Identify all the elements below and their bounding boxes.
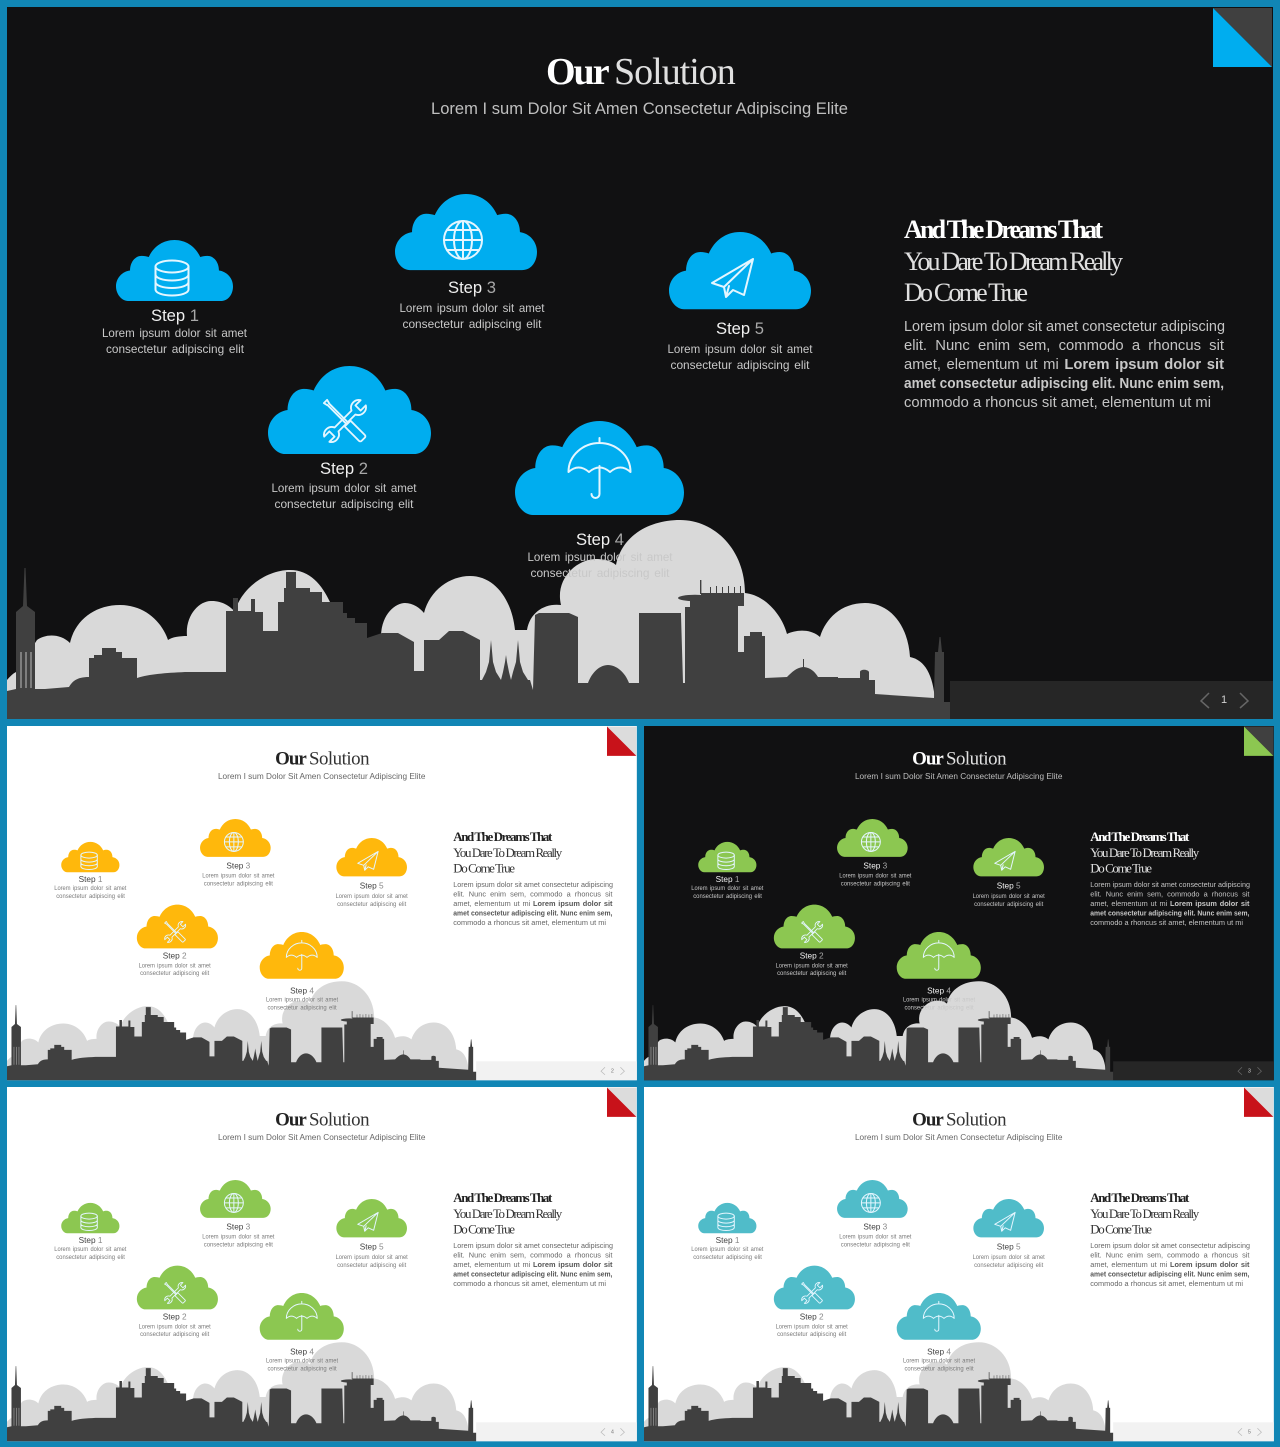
step 2 text: Step 2 (800, 950, 824, 960)
step 4 cloud (260, 1293, 344, 1340)
step 1 text: Lorem ipsum dolor sit amet (691, 886, 764, 892)
pagination (601, 1067, 624, 1075)
step 1 text (102, 306, 248, 356)
step 1 text (691, 1235, 764, 1261)
step 2 text: consectetur adipiscing elit (274, 497, 414, 511)
slide: light green version (7, 1087, 637, 1441)
step 2 text (272, 459, 417, 511)
subtitle: Lorem I sum Dolor Sit Amen Consectetur Adipiscing Elite (218, 1132, 426, 1142)
step 5 text: consectetur adipiscing elit (974, 902, 1044, 908)
side heading: Do Come True (453, 860, 515, 875)
step 4 text: Step 4 (927, 986, 951, 996)
slide background (644, 726, 1274, 1080)
step 4 text: consectetur adipiscing elit (267, 1367, 337, 1373)
step 4 text (528, 530, 673, 580)
step 2 cloud (137, 1266, 218, 1309)
pagination: 1 (1221, 694, 1227, 706)
footer band (476, 1422, 637, 1441)
step 3 text: Step 3 (863, 1221, 888, 1231)
step 5 cloud (973, 1199, 1044, 1237)
step 3 cloud (200, 1180, 271, 1218)
step 5 cloud (336, 838, 407, 876)
step 3 text (400, 278, 545, 331)
step 3 text: consectetur adipiscing elit (402, 317, 542, 331)
step 4 text: Step 4 (290, 986, 314, 996)
subtitle: Lorem I sum Dolor Sit Amen Consectetur Adipiscing Elite (218, 771, 426, 781)
pagination: 4 (611, 1429, 614, 1435)
step 2 cloud (268, 366, 431, 454)
step 4 text: consectetur adipiscing elit (530, 566, 670, 580)
step 5 text: Step 5 (716, 319, 764, 338)
step 3 text: Step 3 (448, 278, 496, 297)
step 2 text: consectetur adipiscing elit (777, 1332, 847, 1338)
step 2 text (776, 1311, 848, 1338)
step 1 cloud (61, 1203, 119, 1233)
title: Solution (309, 1109, 370, 1130)
step 4 text: Step 4 (576, 530, 624, 549)
step 4 cloud (897, 1293, 981, 1340)
step 4 text (903, 1347, 975, 1373)
side heading: And The Dreams That (453, 829, 553, 844)
step 2 text: Step 2 (320, 459, 368, 478)
step 4 cloud (260, 932, 344, 979)
side body text (904, 319, 1225, 411)
step 5 text (973, 881, 1045, 908)
pagination (1238, 1428, 1261, 1436)
corner fold (1244, 726, 1273, 756)
step 3 text: consectetur adipiscing elit (841, 882, 910, 888)
step 2 text: Lorem ipsum dolor sit amet (139, 963, 211, 969)
step 3 text (839, 1221, 912, 1249)
side heading (1090, 829, 1200, 875)
step 1 text: consectetur adipiscing elit (693, 1255, 762, 1261)
step 5 text: Lorem ipsum dolor sit amet (973, 1255, 1045, 1261)
side heading: You Dare To Dream Really (904, 247, 1123, 276)
step 1 text: Step 1 (716, 874, 740, 884)
side body text (1090, 880, 1250, 927)
step 2 text: Lorem ipsum dolor sit amet (139, 1324, 211, 1330)
step 3 cloud (395, 194, 537, 270)
side heading (453, 1190, 563, 1236)
step 5 text: consectetur adipiscing elit (670, 358, 810, 372)
side heading: Do Come True (1090, 1221, 1152, 1236)
step 4 text: Lorem ipsum dolor sit amet (266, 998, 338, 1004)
step 4 cloud (515, 421, 684, 515)
side body text: Lorem ipsum dolor sit amet consectetur adipiscing (1090, 1241, 1250, 1250)
step 5 text: Step 5 (997, 881, 1021, 891)
side body text: Lorem ipsum dolor sit amet consectetur adipiscing (453, 1241, 613, 1250)
step 3 text: Step 3 (226, 860, 251, 870)
title: Our (912, 1109, 943, 1130)
step 2 text: Lorem ipsum dolor sit amet (776, 963, 848, 969)
skyline buildings (644, 1005, 1113, 1080)
step 4 text (903, 986, 975, 1012)
skyline buildings (7, 568, 950, 719)
title: Our (275, 748, 306, 769)
title: Solution (946, 748, 1007, 769)
side body text: amet consectetur adipiscing elit. Nunc enim sem, (453, 1270, 612, 1279)
step 1 text (54, 874, 127, 900)
footer band (1113, 1422, 1274, 1441)
step 2 text (139, 1311, 211, 1338)
footer band (476, 1061, 637, 1080)
step 5 text: consectetur adipiscing elit (974, 1263, 1044, 1269)
step 4 text: consectetur adipiscing elit (267, 1006, 337, 1012)
step 1 cloud (116, 240, 233, 301)
step 4 cloud (897, 932, 981, 979)
step 4 text: Lorem ipsum dolor sit amet (266, 1359, 338, 1365)
step 4 text: consectetur adipiscing elit (904, 1367, 974, 1373)
title: Our (546, 51, 610, 93)
step 2 cloud (774, 905, 855, 948)
title: Solution (946, 1109, 1007, 1130)
step 1 text (54, 1235, 127, 1261)
step 5 text (336, 1242, 408, 1269)
side body text: amet consectetur adipiscing elit. Nunc enim sem, (453, 909, 612, 918)
skyline buildings (7, 1366, 476, 1441)
step 4 text: Lorem ipsum dolor sit amet (903, 1359, 975, 1365)
corner fold (1244, 1087, 1273, 1117)
side body text: elit. Nunc enim sem, commodo a rhoncus sit (904, 338, 1224, 354)
step 3 text: consectetur adipiscing elit (204, 882, 273, 888)
footer band (1113, 1061, 1274, 1080)
step 4 text: Lorem ipsum dolor sit amet (528, 550, 673, 564)
side heading: You Dare To Dream Really (1090, 1206, 1200, 1221)
slide: main dark blue version (7, 7, 1273, 719)
step 4 text (266, 986, 338, 1012)
step 5 cloud (336, 1199, 407, 1237)
side body text: amet consectetur adipiscing elit. Nunc enim sem, (1090, 909, 1249, 918)
side body text (1090, 1241, 1250, 1288)
side heading: Do Come True (904, 278, 1028, 307)
step 2 text: consectetur adipiscing elit (140, 1332, 210, 1338)
step 3 text: Step 3 (863, 860, 888, 870)
slide background (7, 726, 637, 1080)
step 2 text: Step 2 (163, 1311, 187, 1321)
corner fold (607, 1087, 636, 1117)
step 3 text: Lorem ipsum dolor sit amet (202, 1235, 275, 1241)
side body text: commodo a rhoncus sit amet, elementum ut mi (453, 918, 606, 927)
subtitle: Lorem I sum Dolor Sit Amen Consectetur Adipiscing Elite (431, 99, 848, 118)
side body text: amet, elementum ut mi Lorem ipsum dolor sit (1090, 899, 1250, 908)
side body text: elit. Nunc enim sem, commodo a rhoncus sit (1090, 890, 1249, 899)
step 1 text: consectetur adipiscing elit (106, 342, 245, 356)
step 2 cloud (137, 905, 218, 948)
side heading: You Dare To Dream Really (453, 1206, 563, 1221)
title: Solution (614, 51, 736, 93)
step 1 cloud (698, 842, 756, 872)
pagination: 2 (611, 1068, 614, 1074)
step 4 text: consectetur adipiscing elit (904, 1006, 974, 1012)
step 1 text: Step 1 (151, 306, 199, 325)
step 2 text: consectetur adipiscing elit (140, 971, 210, 977)
step 5 text: Step 5 (360, 1242, 384, 1252)
skyline backdrop clouds (7, 981, 469, 1077)
step 1 text: consectetur adipiscing elit (56, 1255, 125, 1261)
side heading: And The Dreams That (904, 215, 1103, 244)
step 2 text: Lorem ipsum dolor sit amet (272, 481, 417, 495)
slide: light teal version (644, 1087, 1274, 1441)
side body text (453, 1241, 613, 1288)
pagination: 5 (1248, 1429, 1251, 1435)
title: Our (912, 748, 943, 769)
side heading: And The Dreams That (1090, 829, 1190, 844)
step 3 text: Lorem ipsum dolor sit amet (400, 301, 545, 315)
step 3 cloud (837, 819, 908, 857)
step 3 text: Lorem ipsum dolor sit amet (202, 874, 275, 880)
step 1 text: consectetur adipiscing elit (693, 894, 762, 900)
side body text: commodo a rhoncus sit amet, elementum ut mi (1090, 918, 1243, 927)
step 1 text: Step 1 (79, 1235, 103, 1245)
step 1 text: Step 1 (79, 874, 103, 884)
step 2 text: Lorem ipsum dolor sit amet (776, 1324, 848, 1330)
side heading (453, 829, 563, 875)
step 2 text (776, 950, 848, 977)
side body text: commodo a rhoncus sit amet, elementum ut mi (453, 1279, 606, 1288)
title: Solution (309, 748, 370, 769)
step 1 text: Lorem ipsum dolor sit amet (102, 326, 248, 340)
slide background (7, 1087, 637, 1441)
step 4 text: Step 4 (927, 1347, 951, 1357)
step 1 text (691, 874, 764, 900)
step 1 text: Lorem ipsum dolor sit amet (54, 886, 127, 892)
step 5 text: Lorem ipsum dolor sit amet (336, 894, 408, 900)
side heading: Do Come True (1090, 860, 1152, 875)
side body text: elit. Nunc enim sem, commodo a rhoncus sit (453, 1251, 612, 1260)
step 2 text: consectetur adipiscing elit (777, 971, 847, 977)
side body text: elit. Nunc enim sem, commodo a rhoncus sit (453, 890, 612, 899)
pagination: 3 (1248, 1068, 1251, 1074)
step 5 text (668, 319, 813, 372)
skyline buildings (7, 1005, 476, 1080)
step 2 cloud (774, 1266, 855, 1309)
pagination (601, 1428, 624, 1436)
step 1 cloud (61, 842, 119, 872)
step 5 text: Step 5 (997, 1242, 1021, 1252)
side body text: Lorem ipsum dolor sit amet consectetur adipiscing (904, 319, 1225, 335)
side body text: amet, elementum ut mi Lorem ipsum dolor sit (453, 1260, 613, 1269)
subtitle: Lorem I sum Dolor Sit Amen Consectetur Adipiscing Elite (855, 1132, 1063, 1142)
step 5 cloud (669, 232, 811, 309)
title: Our (275, 1109, 306, 1130)
step 1 text: Step 1 (716, 1235, 740, 1245)
step 5 text: Lorem ipsum dolor sit amet (336, 1255, 408, 1261)
step 5 text: Lorem ipsum dolor sit amet (973, 894, 1045, 900)
corner fold (607, 726, 636, 756)
footer band (950, 681, 1273, 719)
side body text: amet consectetur adipiscing elit. Nunc enim sem, (1090, 1270, 1249, 1279)
step 1 cloud (698, 1203, 756, 1233)
step 3 text (202, 860, 275, 888)
step 3 text: Step 3 (226, 1221, 251, 1231)
skyline backdrop clouds (7, 520, 935, 712)
side body text: amet consectetur adipiscing elit. Nunc enim sem, (904, 376, 1224, 392)
step 5 text: consectetur adipiscing elit (337, 1263, 407, 1269)
step 5 cloud (973, 838, 1044, 876)
step 2 text (139, 950, 211, 977)
skyline backdrop clouds (644, 981, 1106, 1077)
side heading: And The Dreams That (453, 1190, 553, 1205)
step 3 text: Lorem ipsum dolor sit amet (839, 1235, 912, 1241)
step 4 text: Lorem ipsum dolor sit amet (903, 998, 975, 1004)
side body text: elit. Nunc enim sem, commodo a rhoncus sit (1090, 1251, 1249, 1260)
step 5 text: consectetur adipiscing elit (337, 902, 407, 908)
pagination (1201, 693, 1248, 708)
skyline buildings (644, 1366, 1113, 1441)
step 3 text: consectetur adipiscing elit (841, 1243, 910, 1249)
step 3 text: Lorem ipsum dolor sit amet (839, 874, 912, 880)
side body text: amet, elementum ut mi Lorem ipsum dolor sit (904, 357, 1224, 373)
side body text: amet, elementum ut mi Lorem ipsum dolor sit (1090, 1260, 1250, 1269)
step 1 text: Lorem ipsum dolor sit amet (691, 1247, 764, 1253)
step 4 text: Step 4 (290, 1347, 314, 1357)
slide background (7, 7, 1273, 719)
step 2 text: Step 2 (163, 950, 187, 960)
step 3 text: consectetur adipiscing elit (204, 1243, 273, 1249)
step 1 text: Lorem ipsum dolor sit amet (54, 1247, 127, 1253)
side heading: And The Dreams That (1090, 1190, 1190, 1205)
side heading: You Dare To Dream Really (453, 845, 563, 860)
pagination (1238, 1067, 1261, 1075)
side body text: Lorem ipsum dolor sit amet consectetur adipiscing (453, 880, 613, 889)
side body text: Lorem ipsum dolor sit amet consectetur adipiscing (1090, 880, 1250, 889)
side heading: You Dare To Dream Really (1090, 845, 1200, 860)
step 5 text (336, 881, 408, 908)
step 5 text (973, 1242, 1045, 1269)
step 1 text: consectetur adipiscing elit (56, 894, 125, 900)
slide: light yellow version (7, 726, 637, 1080)
step 3 text (202, 1221, 275, 1249)
step 2 text: Step 2 (800, 1311, 824, 1321)
side body text: commodo a rhoncus sit amet, elementum ut mi (1090, 1279, 1243, 1288)
side body text (453, 880, 613, 927)
step 4 text (266, 1347, 338, 1373)
side body text: amet, elementum ut mi Lorem ipsum dolor sit (453, 899, 613, 908)
side heading (904, 215, 1123, 307)
side heading: Do Come True (453, 1221, 515, 1236)
subtitle: Lorem I sum Dolor Sit Amen Consectetur Adipiscing Elite (855, 771, 1063, 781)
skyline backdrop clouds (644, 1342, 1106, 1438)
step 3 cloud (837, 1180, 908, 1218)
step 3 text (839, 860, 912, 888)
slide background (644, 1087, 1274, 1441)
slide: dark green version (644, 726, 1274, 1080)
skyline backdrop clouds (7, 1342, 469, 1438)
step 5 text: Step 5 (360, 881, 384, 891)
side body text: commodo a rhoncus sit amet, elementum ut mi (904, 395, 1211, 411)
corner fold (1213, 8, 1272, 67)
side heading (1090, 1190, 1200, 1236)
step 5 text: Lorem ipsum dolor sit amet (668, 342, 813, 356)
step 3 cloud (200, 819, 271, 857)
